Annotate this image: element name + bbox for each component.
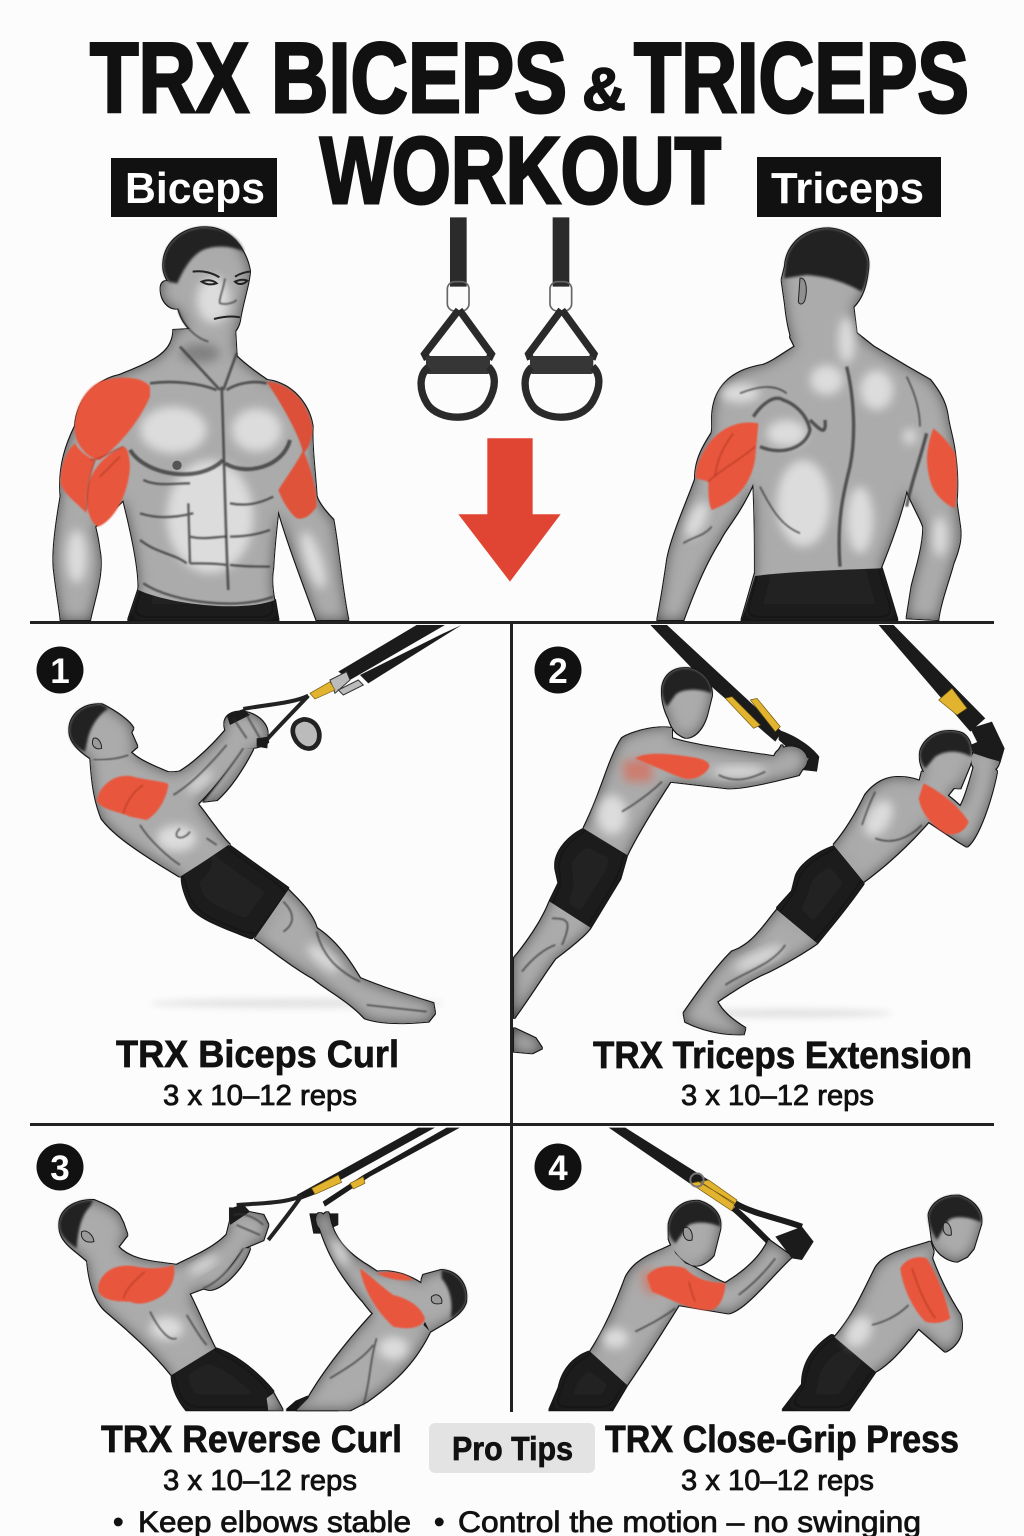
panel: exercise 4	[534, 1128, 981, 1410]
figure: reverse curl	[59, 1128, 466, 1410]
caption: exercise 4: TRX Close-Grip Press	[605, 1419, 959, 1461]
figure: front view biceps	[53, 227, 348, 620]
icon: TRX straps and handles	[421, 217, 599, 417]
caption: exercise 1: 3 x 10–12 reps	[163, 1080, 357, 1112]
caption: exercise 2: TRX Triceps Extension	[593, 1035, 972, 1077]
badge 4	[534, 1144, 582, 1190]
badge 2	[534, 646, 582, 694]
badge 1: 1	[50, 652, 70, 691]
title: TRX BICEPS	[90, 22, 567, 133]
label: triceps: Triceps	[771, 164, 924, 213]
pro tips list	[113, 1506, 921, 1536]
figure: back view triceps	[657, 228, 961, 620]
title: WORKOUT	[320, 118, 721, 224]
title: &	[582, 56, 626, 123]
panel: exercise 3	[36, 1128, 466, 1410]
caption: exercise 2	[593, 1035, 972, 1112]
caption: exercise 3: TRX Reverse Curl	[101, 1419, 402, 1461]
panel: exercise 2	[514, 625, 1005, 1053]
label: biceps: Biceps	[125, 164, 265, 213]
badge 3: 3	[50, 1149, 70, 1188]
pro tips badge	[429, 1423, 595, 1473]
divider lines	[30, 621, 994, 1412]
caption: exercise 4: 3 x 10–12 reps	[681, 1465, 874, 1497]
figure: triceps extension	[514, 625, 1005, 1053]
arrow: down	[458, 438, 561, 582]
caption: exercise 2: 3 x 10–12 reps	[681, 1080, 874, 1112]
panel: exercise 1	[36, 625, 462, 1023]
badge 4: 4	[548, 1149, 568, 1188]
caption: exercise 3: 3 x 10–12 reps	[163, 1465, 357, 1497]
badge 1	[36, 646, 84, 694]
title	[90, 22, 969, 224]
badge 3	[36, 1144, 84, 1190]
badge 2: 2	[548, 652, 568, 691]
pro tips badge: Pro Tips	[452, 1430, 573, 1467]
figure: biceps curl	[69, 625, 462, 1023]
caption: exercise 4	[605, 1419, 959, 1497]
caption: exercise 1: TRX Biceps Curl	[116, 1034, 399, 1076]
label: triceps	[757, 157, 941, 217]
caption: exercise 3	[101, 1419, 402, 1497]
caption: exercise 1	[116, 1034, 399, 1112]
figure: close-grip press	[549, 1128, 981, 1410]
